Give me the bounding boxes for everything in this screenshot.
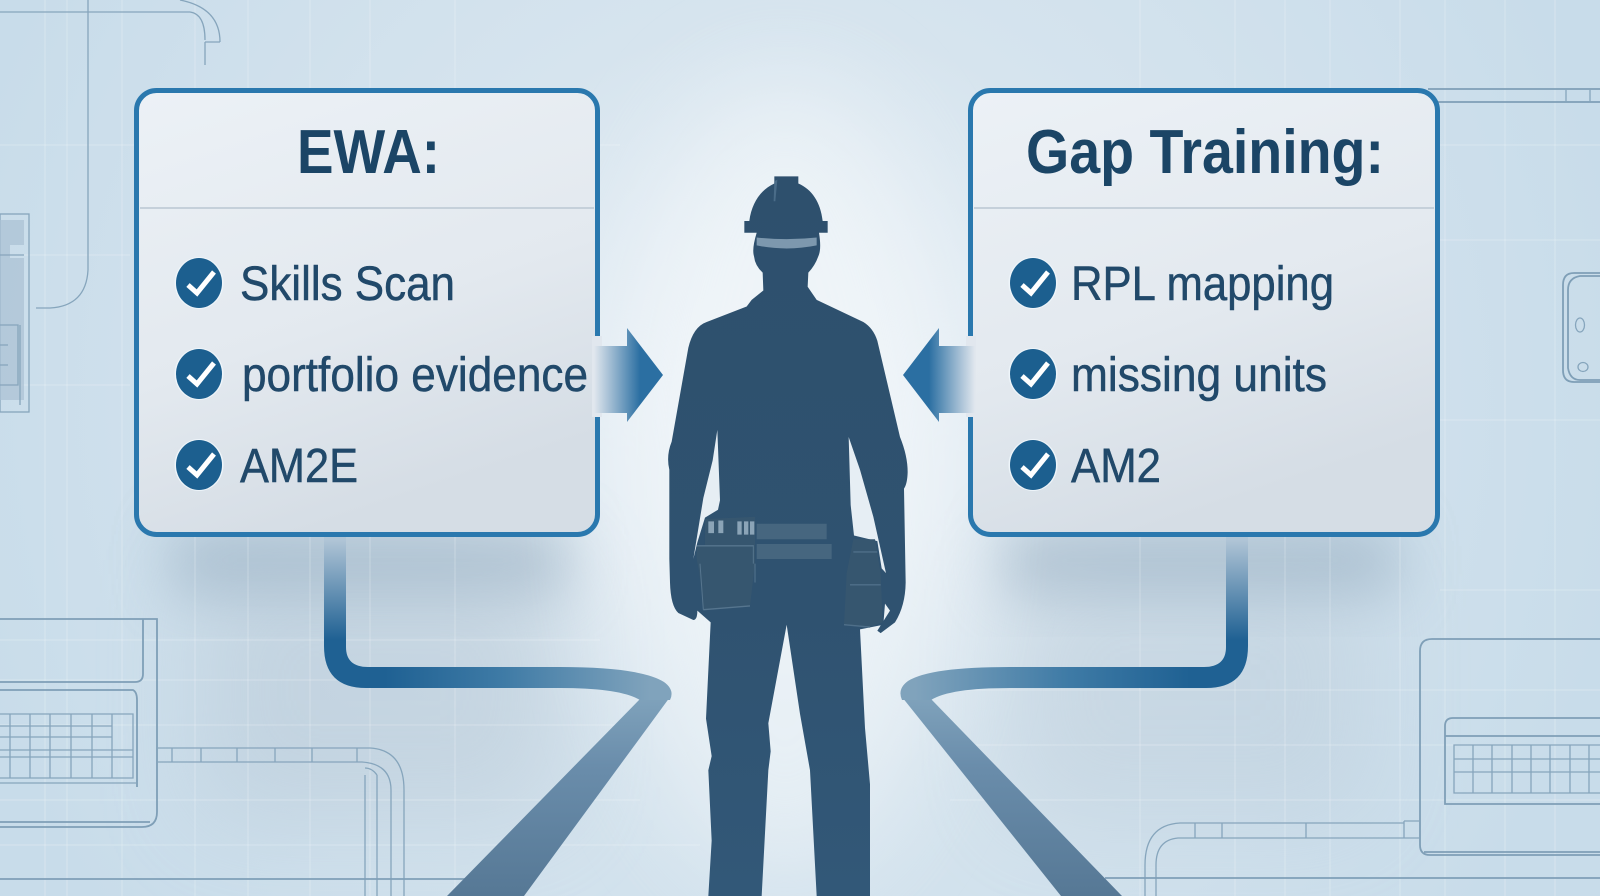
check icon: RPL mapping bbox=[1008, 257, 1058, 309]
left pathway to worker bbox=[324, 537, 672, 896]
item: missing units: missing units bbox=[1071, 349, 1327, 402]
panel card: Gap Training bbox=[970, 90, 1438, 534]
blueprint: top right conduit and device bbox=[1428, 89, 1600, 382]
check icon: AM2E bbox=[174, 439, 224, 491]
item: RPL mapping: RPL mapping bbox=[1071, 258, 1334, 311]
hard hat band bbox=[757, 237, 817, 248]
item: portfolio evidence: portfolio evidence bbox=[242, 349, 588, 402]
blueprint: bottom right cabinet and conduit bbox=[1105, 639, 1600, 896]
arm gap right bbox=[849, 437, 886, 573]
right pathway to worker bbox=[900, 537, 1248, 896]
arrow: Gap Training to worker bbox=[903, 328, 975, 422]
hard hat ridge bbox=[774, 180, 777, 201]
panel: EWA bbox=[136, 90, 602, 534]
heading: Gap Training: Gap Training: bbox=[1026, 118, 1384, 187]
worker silhouette bbox=[668, 176, 908, 896]
blueprint: top left conduit and device bbox=[0, 0, 220, 412]
blueprint: bottom left cabinet and conduit bbox=[0, 619, 470, 896]
check icon: AM2 bbox=[1008, 439, 1058, 491]
tool belt bbox=[697, 517, 883, 627]
panel card: EWA bbox=[136, 90, 598, 534]
divider: Gap Training bbox=[974, 207, 1434, 209]
divider: EWA bbox=[140, 207, 594, 209]
checklist: Gap Training bbox=[1008, 257, 1334, 493]
check icon: portfolio evidence bbox=[174, 348, 224, 400]
arrow: EWA to worker bbox=[594, 328, 663, 422]
check icon: Skills Scan bbox=[174, 257, 224, 309]
panel: Gap Training bbox=[966, 90, 1438, 534]
checklist: EWA bbox=[174, 257, 588, 493]
arrow gap: EWA bbox=[592, 336, 602, 417]
heading: EWA: EWA: bbox=[297, 118, 440, 187]
arm gap left bbox=[693, 430, 720, 559]
item: AM2E: AM2E bbox=[240, 440, 358, 493]
item: AM2: AM2 bbox=[1071, 440, 1161, 493]
worker body bbox=[668, 176, 908, 896]
check icon: missing units bbox=[1008, 348, 1058, 400]
item: Skills Scan: Skills Scan bbox=[240, 258, 455, 311]
arrow gap: Gap Training bbox=[966, 336, 976, 417]
